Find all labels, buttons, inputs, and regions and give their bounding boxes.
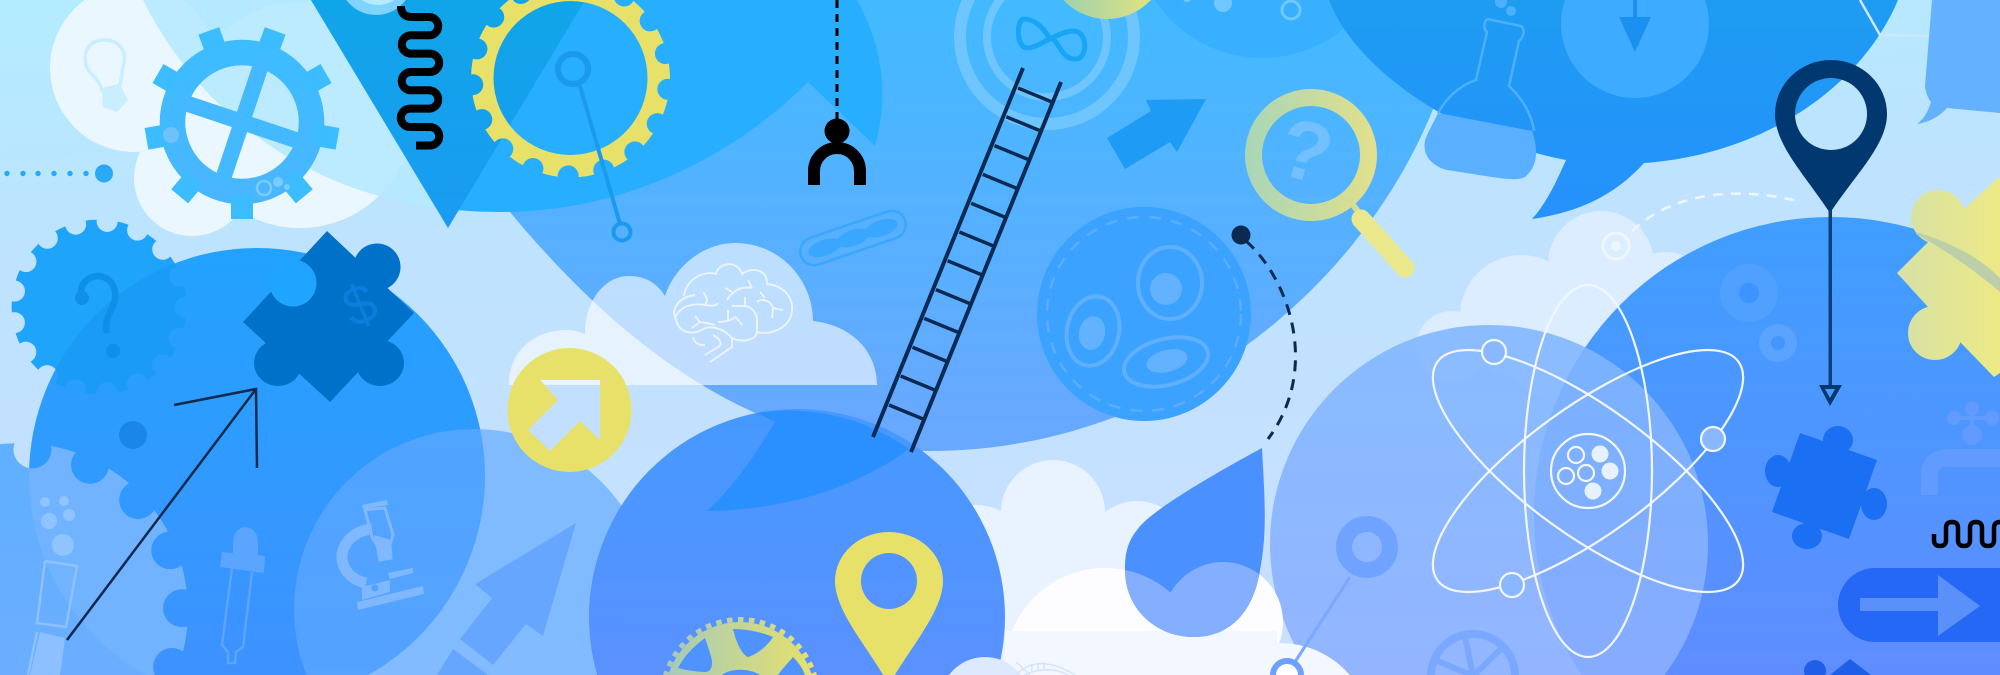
black wave <box>1934 522 2000 546</box>
yellow pin <box>835 532 943 675</box>
wheel at base of atom <box>1431 634 1515 675</box>
small target circles <box>1720 264 1797 362</box>
magnifying glass: ? <box>1269 99 1343 203</box>
speech bubble far top right <box>1917 0 2000 124</box>
small cloud and dna <box>940 657 1075 675</box>
bottom gear <box>662 620 818 675</box>
circle with down arrow <box>1561 0 1709 98</box>
dark speech bubble top right <box>1329 0 1898 219</box>
yellow puzzle piece <box>1897 178 2000 377</box>
gear with crossbars <box>145 27 339 219</box>
blue node with connector and ring <box>1273 524 1390 675</box>
white cloud bottom <box>1005 562 1283 675</box>
cloud bottom centre <box>915 460 1240 675</box>
crescent top <box>339 0 413 15</box>
pill with arrow <box>1838 568 2000 642</box>
blue puzzle piece <box>1765 426 1887 549</box>
icon: microscope <box>342 500 424 610</box>
white lobe bottom right <box>1188 643 1372 675</box>
white cloud top left <box>50 0 413 236</box>
water drop <box>1124 448 1265 637</box>
yellow gear <box>471 0 670 178</box>
blue arrow <box>1107 99 1206 169</box>
large central speech bubble <box>500 0 1450 451</box>
small puzzle at bottom <box>1804 659 1871 675</box>
large arrow lower <box>437 523 576 675</box>
hanging figure <box>814 0 860 185</box>
ladder <box>873 68 1061 452</box>
blue top speech bubble <box>311 0 882 212</box>
icon: brain <box>674 264 792 362</box>
right big circle <box>1534 217 2000 675</box>
magnifying glass <box>1254 98 1405 268</box>
black squiggle <box>401 6 439 146</box>
dark dot <box>119 421 147 449</box>
brain cloud <box>509 243 877 385</box>
dotted line <box>4 164 113 182</box>
icon: flask <box>1424 0 1536 179</box>
pin line in gear <box>558 54 630 240</box>
top yellow circle <box>1047 0 1167 19</box>
navy pin with line <box>1775 60 1887 406</box>
cell circle <box>1037 207 1251 421</box>
icon: faucet <box>1921 402 2000 495</box>
navy arrow <box>67 389 257 640</box>
top centre circle with dots <box>1134 0 1390 58</box>
icon: dropper <box>220 527 265 663</box>
dark puzzle piece: $ <box>334 269 386 340</box>
atom circle <box>1270 325 1708 675</box>
navy dashed arc <box>1232 226 1295 439</box>
big blue circle left <box>29 248 485 675</box>
bubble tail darker <box>707 411 909 511</box>
icon: light bulb <box>85 40 128 112</box>
translucent circle lower left <box>294 429 654 675</box>
lower centre circle <box>589 409 1005 675</box>
hexagon outline <box>1860 0 1951 36</box>
white target and dashed arc <box>1603 194 1798 259</box>
yellow circle with arrow <box>508 348 632 472</box>
cloud behind atom <box>1416 211 1713 402</box>
pale part of top bubble <box>143 0 500 212</box>
concentric rings with infinity icon <box>960 0 1134 124</box>
light gear bottom left <box>0 443 188 675</box>
icon: microbe capsule <box>796 207 910 269</box>
ghost arrow <box>1867 388 1923 408</box>
dark puzzle piece <box>243 231 414 402</box>
darker triangle <box>311 0 585 228</box>
icon: test tube and bubbles <box>28 496 77 675</box>
atom <box>1400 285 1776 657</box>
question mark gear <box>12 220 186 394</box>
